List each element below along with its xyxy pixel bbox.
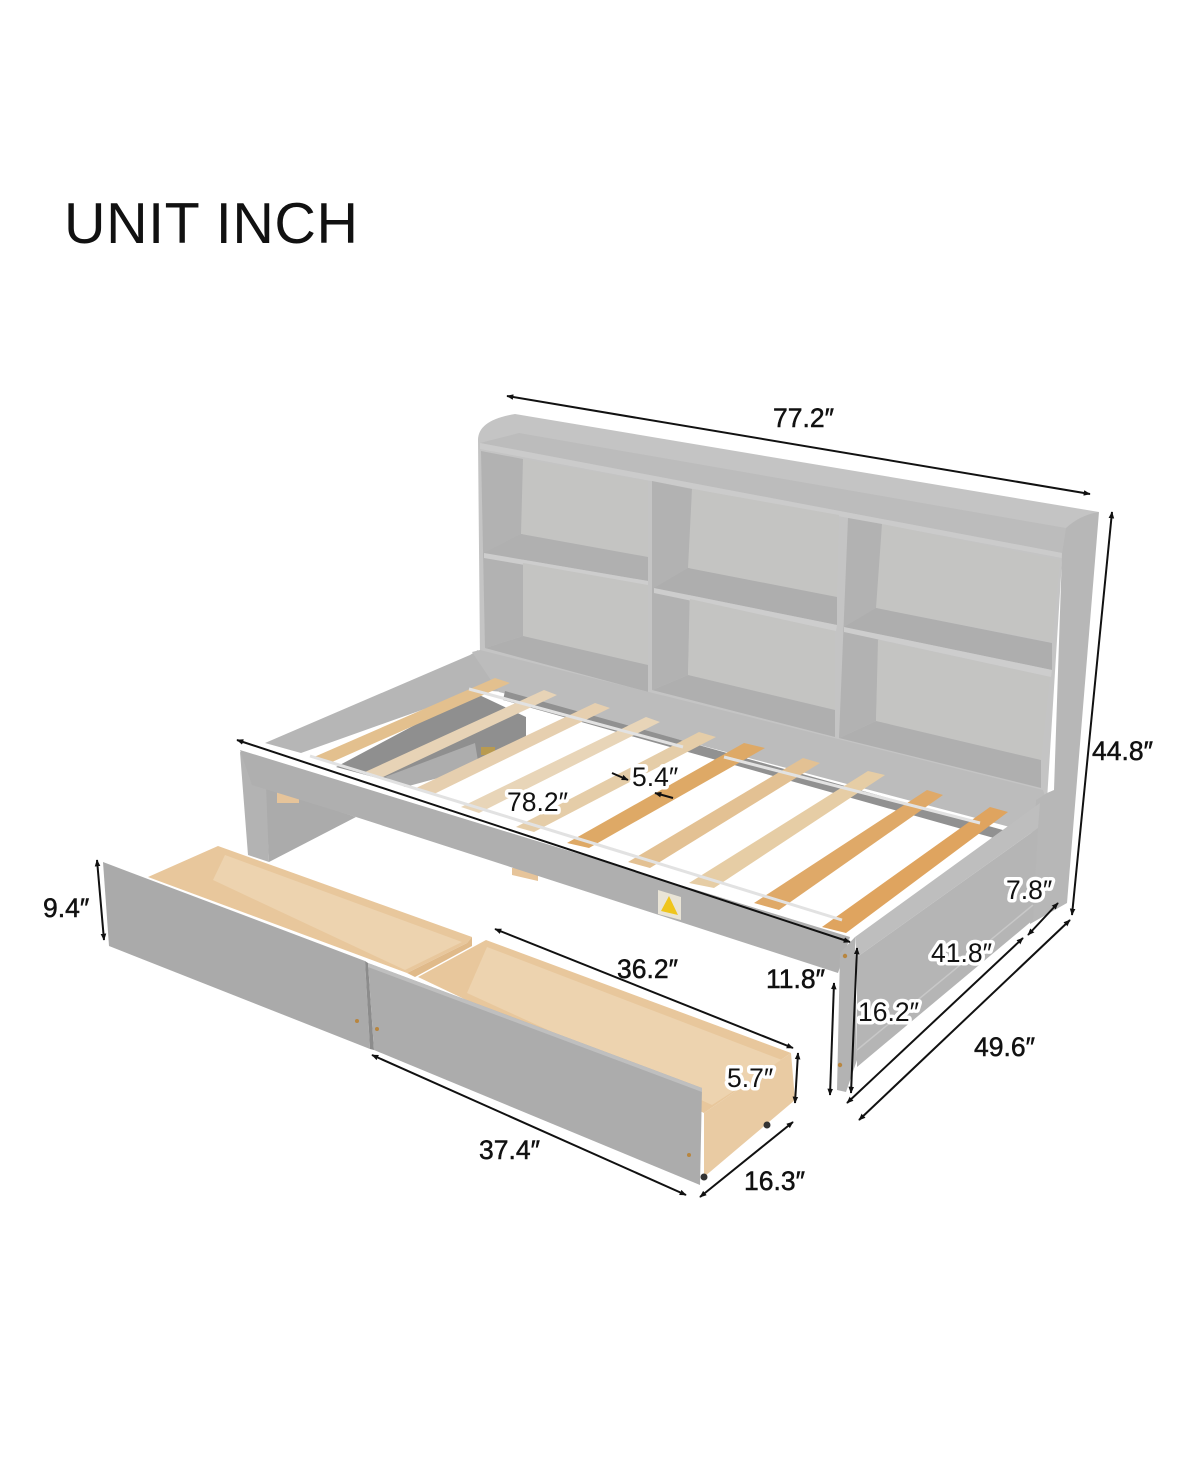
warning label [658, 890, 681, 920]
footboard [837, 803, 1040, 1092]
shelf cell: middle column [652, 481, 839, 737]
shelf cell: left column [481, 451, 648, 692]
wooden slats [314, 678, 1008, 933]
dimension labels: 16.2″ [858, 997, 919, 1027]
head-end rail [265, 650, 526, 787]
dimension arrows [97, 396, 1112, 1197]
dimension labels: 7.8″ [1006, 875, 1052, 905]
drawers illustration [103, 846, 795, 1185]
rear rail and slat support [472, 650, 1047, 842]
white slat straps [310, 689, 980, 920]
dimension labels: 5.7″ [727, 1063, 773, 1093]
dimension labels: 49.6″ [974, 1032, 1035, 1062]
shelf cell: right column [839, 518, 1060, 788]
dimension labels: 44.8″ [1092, 736, 1153, 766]
dimension labels: 11.8″ [766, 964, 825, 994]
dimension labels: 9.4″ [43, 893, 89, 923]
dimension labels: 77.2″ [773, 403, 834, 433]
dimension labels [43, 403, 1153, 1196]
dimension labels: 16.3″ [744, 1166, 805, 1196]
left drawer [103, 846, 472, 1049]
title: UNIT INCH [64, 192, 358, 256]
right drawer [368, 940, 795, 1185]
front rail [240, 750, 850, 973]
wood block under rail [512, 868, 538, 881]
dimension labels: 41.8″ [931, 938, 992, 968]
bookcase headboard [478, 414, 1099, 800]
dimension labels: 37.4″ [479, 1135, 540, 1165]
drawer gap [365, 961, 374, 1050]
dimension labels: 5.4″ [632, 762, 678, 792]
side panel of headboard [1030, 512, 1099, 924]
dimension labels: 78.2″ [507, 787, 568, 817]
dimension labels: 36.2″ [617, 954, 678, 984]
left leg [240, 752, 356, 862]
bed frame illustration [240, 414, 1099, 1092]
